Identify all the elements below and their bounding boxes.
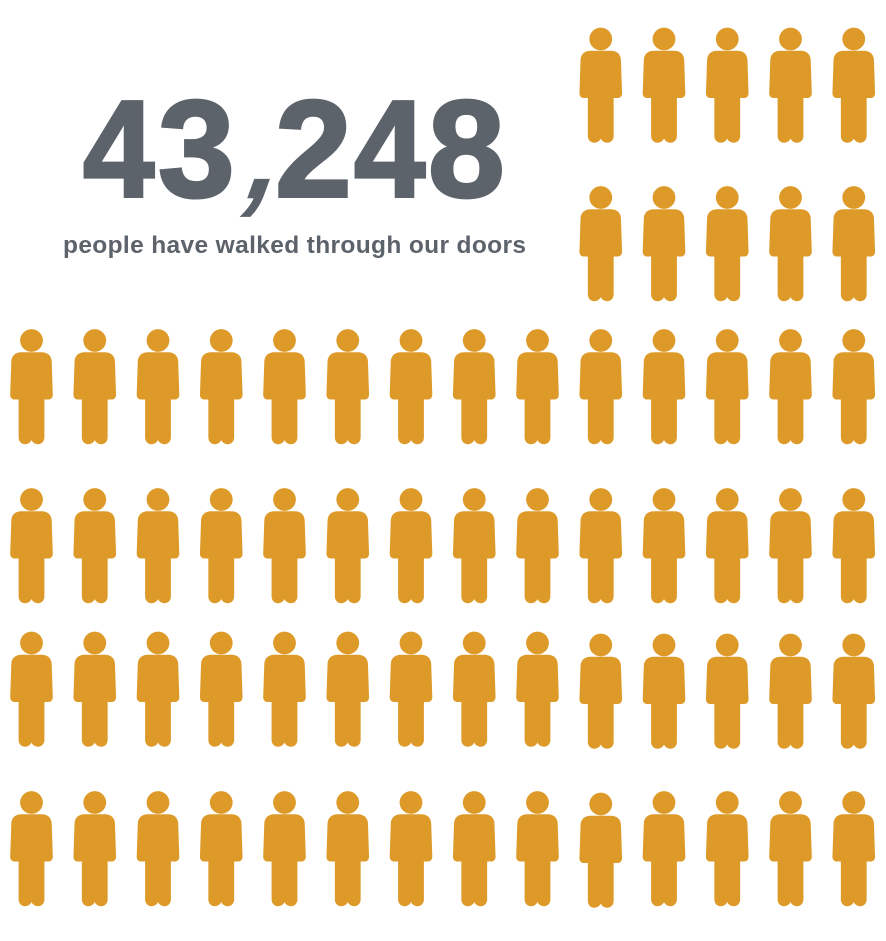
subtitle: people have walked through our doors: [63, 232, 526, 259]
row 4: people pictograms: [10, 488, 875, 603]
row 5: people pictograms: [10, 632, 875, 749]
headline: 43,248: 2: [275, 72, 352, 226]
headline: 43,248: [83, 72, 505, 227]
headline: 43,248: 4: [83, 72, 154, 227]
row 6: people pictograms: [10, 791, 875, 908]
headline: 43,248: ,: [232, 90, 309, 223]
row 3: people pictograms: [10, 329, 875, 444]
headline: 43,248: 4: [354, 72, 425, 227]
row 2: people pictograms: [579, 186, 875, 301]
headline: 43,248: 8: [428, 72, 505, 226]
headline: 43,248: 3: [158, 72, 235, 226]
row 1: people pictograms: [579, 28, 875, 143]
